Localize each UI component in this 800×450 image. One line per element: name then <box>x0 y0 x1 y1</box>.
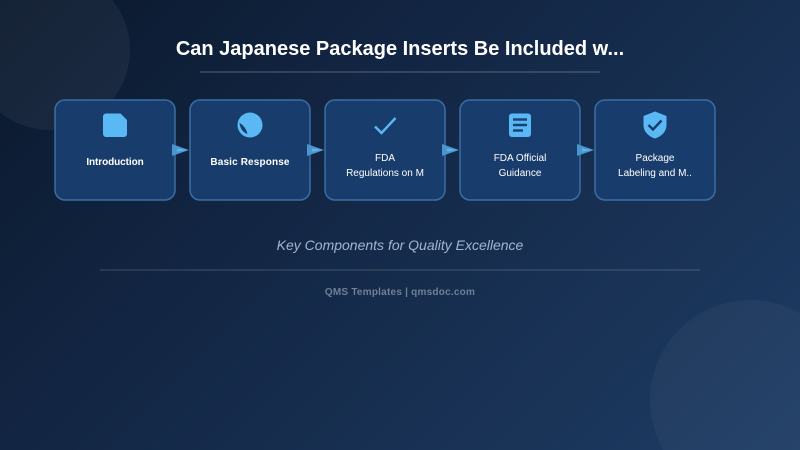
label: FDA Official Guidance: FDA Official <box>494 153 546 164</box>
footer divider <box>100 269 700 271</box>
arrow 4 <box>577 144 594 156</box>
footer text: QMS Templates | qmsdoc.com <box>325 287 475 298</box>
step card: Introduction <box>54 99 176 201</box>
label: FDA Official Guidance <box>494 153 546 179</box>
label: Package Labeling and M..: Labeling and M.. <box>618 168 692 179</box>
label: FDA Regulations on M: Regulations on M <box>346 168 424 179</box>
step card: Basic Response <box>189 99 311 201</box>
step card: FDA Regulations on M <box>324 99 446 201</box>
label: FDA Regulations on M: FDA <box>375 153 395 164</box>
arrow 3 <box>442 144 459 156</box>
label: FDA Regulations on M <box>346 153 424 179</box>
step card: FDA Official Guidance <box>459 99 581 201</box>
title: Can Japanese Package Inserts Be Included w... <box>176 38 624 60</box>
subtitle: Key Components for Quality Excellence <box>277 237 523 253</box>
label: Introduction: Introduction <box>86 157 144 168</box>
label: Package Labeling and M..: Package <box>636 153 674 164</box>
arrow 1 <box>172 144 189 156</box>
label: FDA Official Guidance: Guidance <box>499 168 541 179</box>
decorative circle: bottom right <box>650 300 800 450</box>
title underline <box>200 71 600 73</box>
arrow 2 <box>307 144 324 156</box>
label: Package Labeling and M.. <box>618 153 692 179</box>
label: Basic Response: Basic Response <box>210 157 290 168</box>
step card: Package Labeling <box>594 99 716 201</box>
decorative circle: top left <box>0 0 130 130</box>
